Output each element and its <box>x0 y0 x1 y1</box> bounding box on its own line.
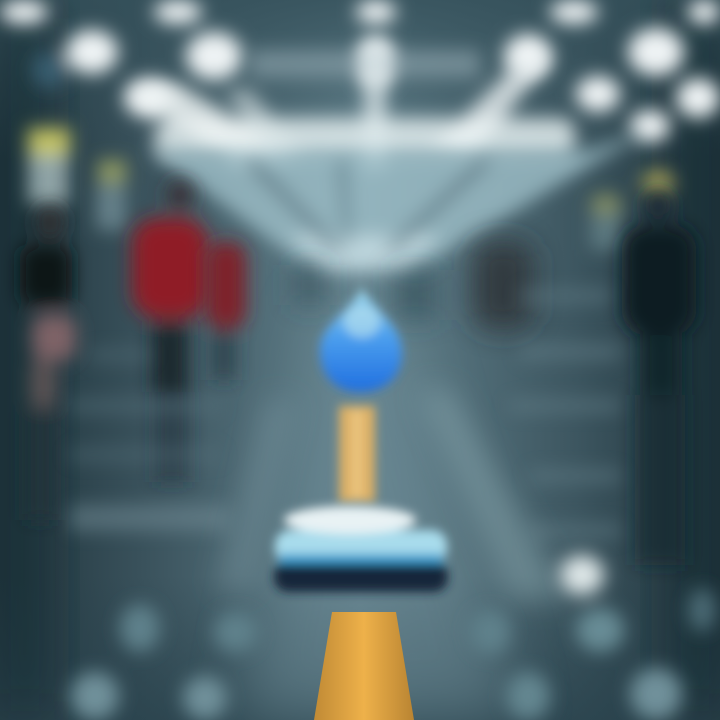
water dish <box>274 506 448 592</box>
right yellow lights <box>590 170 674 250</box>
floor lights <box>71 555 716 720</box>
lower orange column <box>314 612 414 720</box>
ceiling light fixtures <box>0 0 720 142</box>
stair rows right <box>510 290 620 537</box>
stair rows left <box>70 350 230 531</box>
figure: dark person left <box>20 206 76 520</box>
light beams to dish <box>215 390 570 600</box>
upper yellow column <box>339 406 375 502</box>
left yellow lights <box>28 128 126 230</box>
light funnel <box>150 130 650 272</box>
icon: water drop <box>320 288 402 392</box>
ceiling light panel band <box>130 40 575 170</box>
figure: dark person centre right <box>295 240 534 330</box>
figure: second red person <box>206 242 246 380</box>
figure: red jacket person <box>132 180 208 482</box>
figure: dark person right <box>622 190 696 565</box>
